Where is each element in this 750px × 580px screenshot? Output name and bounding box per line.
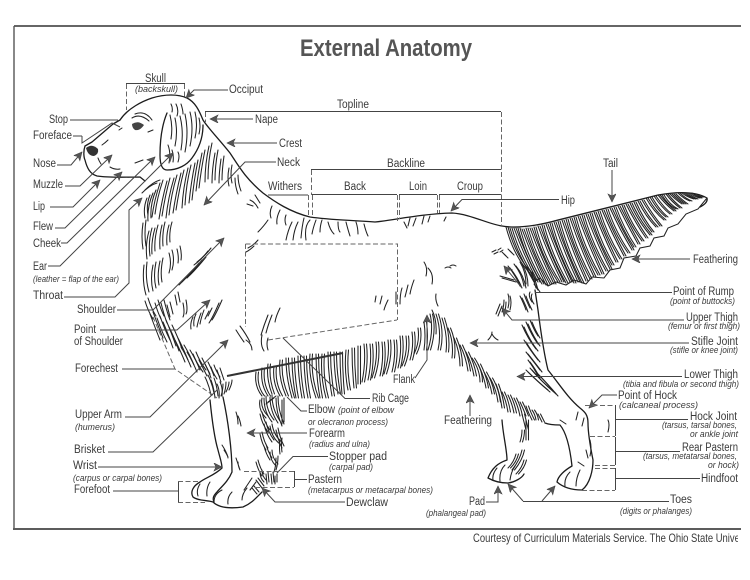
label: Nose: Nose <box>33 158 56 170</box>
label: Hock Joint <box>585 405 738 440</box>
label: Rear Pastern: or hock) <box>708 460 739 471</box>
label: Hip: Hip <box>561 195 575 207</box>
label: Crest: Crest <box>279 138 303 150</box>
label: Neck <box>204 157 300 205</box>
label: Hindfoot: Hindfoot <box>701 473 739 485</box>
label: Elbow: Elbow <box>308 404 336 416</box>
label: Flew: Flew <box>33 221 54 233</box>
label: Toes <box>508 484 692 517</box>
label: Withers <box>268 181 308 216</box>
dog outline <box>120 95 707 227</box>
label: Point of Rump <box>504 266 735 307</box>
label: Skull <box>126 73 185 110</box>
label: Forechest <box>75 317 217 398</box>
label: Back <box>312 181 398 221</box>
label: Forechest: Forechest <box>75 363 119 375</box>
label: Pastern: (metacarpus or metacarpal bones) <box>308 485 433 496</box>
label: Occiput: Occiput <box>229 84 264 96</box>
label: Lip: Lip <box>33 201 45 213</box>
belly feathering <box>256 314 542 474</box>
label: Rear Pastern: (tarsus, metatarsal bones, <box>643 451 737 462</box>
label: Upper Arm: Upper Arm <box>75 409 122 421</box>
label: Feathering belly <box>444 395 492 427</box>
label: Ear <box>33 153 173 285</box>
label: Feathering belly: Feathering <box>444 415 492 427</box>
label: Skull: Skull <box>145 73 166 85</box>
label: Neck: Neck <box>277 157 300 169</box>
label: Hindfoot <box>582 468 739 490</box>
ear <box>160 113 203 170</box>
label: Stifle Joint: (stifle or knee joint) <box>670 345 738 356</box>
label: Point of Shoulder: Point <box>74 324 97 336</box>
label: Forearm: Forearm <box>309 428 345 440</box>
label: Hock Joint: Hock Joint <box>690 411 738 423</box>
label: Feathering tail <box>632 254 738 266</box>
label: Stopper pad: Stopper pad <box>329 451 387 463</box>
label: Upper Thigh <box>502 308 740 332</box>
label: Ear: Ear <box>33 261 47 273</box>
label: Wrist: Wrist <box>73 460 98 472</box>
label: Skull: (backskull) <box>135 84 178 95</box>
label: Brisket <box>74 390 217 456</box>
label: Rear Pastern: Rear Pastern <box>682 442 738 454</box>
label: Point of Rump: Point of Rump <box>673 286 734 298</box>
label: Upper Arm <box>75 340 228 433</box>
label: Stopper pad <box>277 451 387 473</box>
dog illustration <box>84 95 707 508</box>
label: Flew <box>33 172 122 233</box>
label: Lower Thigh: Lower Thigh <box>684 369 738 381</box>
back fur <box>246 195 446 252</box>
label: Point of Shoulder <box>74 300 210 348</box>
label: Tail <box>603 158 618 202</box>
forearm feathering <box>254 395 284 492</box>
label: Stifle Joint <box>470 336 739 356</box>
label: Upper Thigh: (femur or first thigh) <box>668 321 740 332</box>
label: Elbow <box>287 397 395 428</box>
label: Stifle Joint: Stifle Joint <box>691 336 739 348</box>
label: Forearm <box>247 428 370 450</box>
label: Toes: (digits or phalanges) <box>620 506 692 517</box>
eye and nose <box>132 122 144 130</box>
label: Backline: Backline <box>387 158 425 170</box>
label: Ear: (leather = flap of the ear) <box>33 274 119 285</box>
body fur <box>375 262 456 334</box>
label: Elbow: or olecranon process) <box>308 417 388 428</box>
label: Back: Back <box>344 181 366 193</box>
label: Cheek <box>33 157 155 250</box>
label: Hip <box>451 195 575 211</box>
label: Hock Joint: or ankle joint <box>690 429 738 440</box>
label: Stop: Stop <box>49 114 68 126</box>
label: Forefoot: Forefoot <box>74 484 111 496</box>
label: Elbow: (point of elbow <box>338 405 395 416</box>
label: Wrist: (carpus or carpal bones) <box>73 473 162 484</box>
label: Throat: Throat <box>33 290 64 302</box>
label: Upper Arm: (humerus) <box>75 422 115 433</box>
label: Brisket: Brisket <box>74 444 106 456</box>
label: Pad: (phalangeal pad) <box>426 508 486 519</box>
label: Pastern <box>244 471 433 496</box>
label: Crest <box>227 138 303 150</box>
label: Wrist <box>73 460 222 484</box>
label: Lip <box>33 180 100 213</box>
label: Dewclaw <box>262 488 389 509</box>
label: Foreface <box>33 123 120 143</box>
foot toes <box>197 465 580 504</box>
label: Foreface: Foreface <box>33 130 72 142</box>
label: Shoulder: Shoulder <box>77 304 116 316</box>
label: Hock Joint: (tarsus, tarsal bones, <box>662 420 737 431</box>
label: Croup <box>439 181 501 213</box>
title: External Anatomy <box>300 35 473 62</box>
label: Topline: Topline <box>337 99 369 111</box>
label: Point of Rump: (point of buttocks) <box>670 296 735 307</box>
label: Dewclaw: Dewclaw <box>346 497 389 509</box>
label: Flank <box>393 315 427 386</box>
label: Upper Thigh: Upper Thigh <box>686 312 738 324</box>
label: Rib Cage <box>227 244 409 405</box>
label: Cheek: Cheek <box>33 238 61 250</box>
label: Nape <box>210 114 278 126</box>
label: Rear Pastern <box>595 437 739 471</box>
label: Croup: Croup <box>457 181 483 193</box>
label: Lower Thigh <box>517 369 739 390</box>
neck and ruff fur <box>145 143 241 326</box>
chest fur <box>153 312 232 396</box>
label: Stopper pad: (carpal pad) <box>329 462 373 473</box>
label: Point of Hock: Point of Hock <box>618 390 677 402</box>
label: Throat <box>33 198 142 302</box>
label: Point of Hock <box>589 390 698 411</box>
label: Occiput <box>186 84 264 98</box>
label: Pastern: Pastern <box>308 474 342 486</box>
label: Flank: Flank <box>393 374 415 386</box>
label: Feathering tail: Feathering <box>693 254 738 266</box>
label: Point of Shoulder: of Shoulder <box>74 336 123 348</box>
label: Withers: Withers <box>268 181 302 193</box>
label: Forearm: (radius and ulna) <box>309 439 370 450</box>
label: Loin: Loin <box>409 181 427 193</box>
label: Rib Cage: Rib Cage <box>372 393 409 405</box>
label: Pad: Pad <box>469 496 485 508</box>
label: Loin <box>399 181 438 219</box>
label: Pad <box>426 486 498 519</box>
label: Tail: Tail <box>603 158 618 170</box>
label: Stop <box>49 114 118 126</box>
label: Forefoot <box>74 481 205 502</box>
label: Nose <box>33 152 82 170</box>
label: Muzzle: Muzzle <box>33 179 63 191</box>
label: Muzzle <box>33 155 112 191</box>
label: Nape: Nape <box>255 114 278 126</box>
rear leg fur <box>492 248 556 394</box>
label: Shoulder <box>77 238 224 316</box>
label: Point of Hock: (calcaneal process) <box>619 400 698 411</box>
label: Topline <box>205 99 502 226</box>
label: Toes: Toes <box>670 494 692 506</box>
tail fur <box>506 193 702 285</box>
